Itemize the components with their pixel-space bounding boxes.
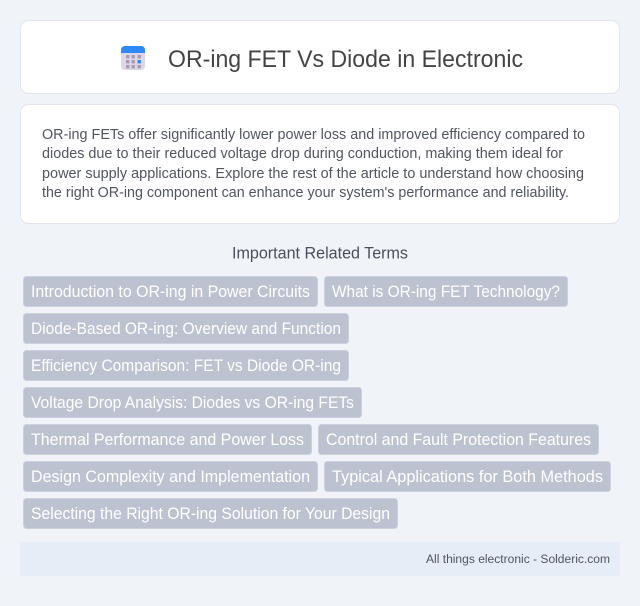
tag: Selecting the Right OR-ing Solution for Your Design [31,505,390,523]
intro paragraph: diodes due to their reduced voltage drop during conduction, making them ideal for [42,146,563,162]
tag: Typical Applications for Both Methods [332,468,603,486]
intro paragraph: OR-ing FETs offer significantly lower power loss and improved efficiency compared to [42,127,585,143]
tag: What is OR-ing FET Technology? [332,283,560,301]
tag: Voltage Drop Analysis: Diodes vs OR-ing FETs [31,394,354,412]
tag: Efficiency Comparison: FET vs Diode OR-ing [31,357,341,375]
tag [24,276,318,306]
tag [24,314,348,344]
footer credit: All things electronic - Solderic.com [426,552,610,566]
tag [24,462,318,492]
tag: Diode-Based OR-ing: Overview and Function [31,320,341,338]
intro paragraph [42,127,585,201]
tag [324,462,610,492]
tag [24,350,348,380]
tag: Control and Fault Protection Features [326,431,591,449]
tag [24,498,398,528]
icon: calendar [121,46,145,70]
tag [24,424,312,454]
tag: Thermal Performance and Power Loss [31,431,304,449]
intro paragraph: the right OR-ing component can enhance your system's performance and reliability. [42,185,569,201]
footer bar [20,542,620,576]
title: OR-ing FET Vs Diode in Electronic [168,46,523,73]
panel: intro text card [20,104,620,224]
tag: Design Complexity and Implementation [31,468,310,486]
heading: important related terms: Important Related Terms [232,244,408,262]
tag list [24,276,610,528]
panel: title card [20,20,620,94]
tag [318,424,598,454]
tag [24,388,362,418]
intro paragraph: power supply applications. Explore the rest of the article to understand how choosing [42,166,584,182]
tag: Introduction to OR-ing in Power Circuits [31,283,310,301]
tag [324,276,568,306]
